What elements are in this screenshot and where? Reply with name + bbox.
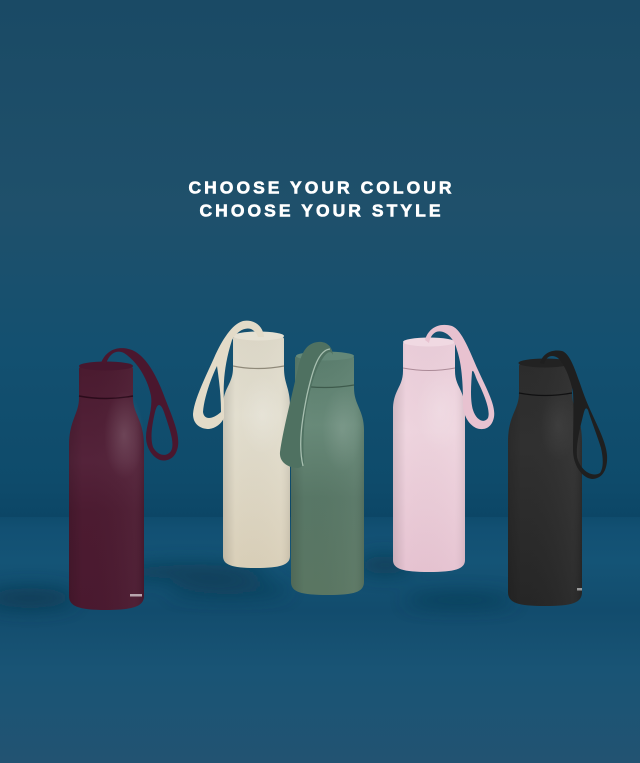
logo mark [577, 588, 582, 590]
bottle: green [280, 342, 364, 595]
bottle: cream [193, 321, 290, 568]
floor shadows [0, 556, 515, 608]
bottle: black [508, 350, 607, 606]
background: floor [0, 517, 640, 763]
title: CHOOSE YOUR STYLE [200, 200, 440, 220]
background: wall [0, 0, 640, 518]
black strap [540, 350, 607, 479]
pink strap [425, 325, 494, 429]
burgundy strap [101, 348, 178, 460]
bottle: burgundy [69, 348, 178, 610]
title: CHOOSE YOUR COLOUR [188, 178, 452, 198]
logo mark [130, 594, 142, 596]
bottle: pink [393, 325, 494, 572]
title [188, 178, 452, 220]
cream strap [193, 321, 264, 429]
green strap [280, 342, 333, 468]
